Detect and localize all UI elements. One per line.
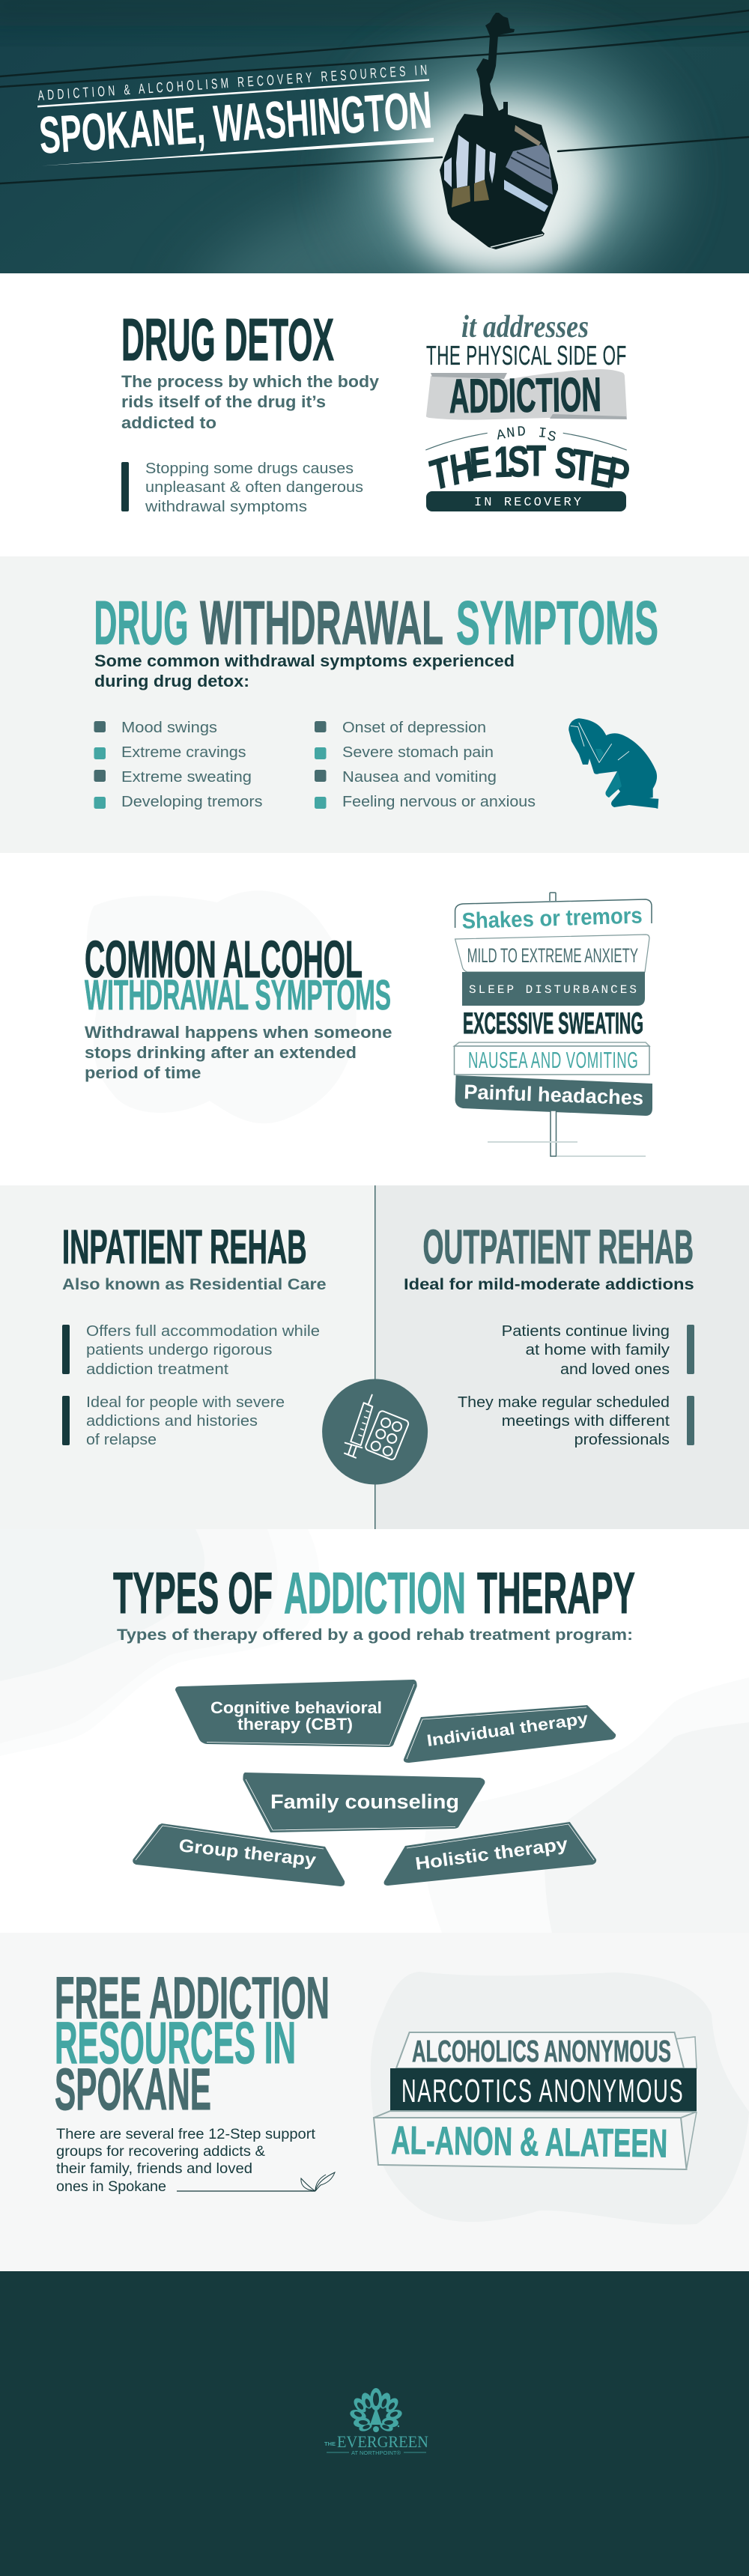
column: inpatient rehab: of relapse xyxy=(86,1432,157,1448)
list: symptoms column two: Onset of depression xyxy=(342,720,486,736)
lettering: first step badge: IN RECOVERY xyxy=(474,496,581,510)
column: outpatient rehab: Patients continue living xyxy=(502,1323,670,1340)
column: inpatient rehab: addictions and histories xyxy=(86,1413,258,1430)
text: definition: rids itself of the drug it’s xyxy=(121,392,326,411)
panel: drug withdrawal symptoms xyxy=(0,556,749,853)
card: individual therapy xyxy=(404,1705,616,1763)
callout: withdrawal warning: Stopping some drugs causes xyxy=(145,461,354,477)
card: cognitive behavioral therapy: Cognitive behavioral xyxy=(210,1698,382,1717)
card: holistic therapy xyxy=(384,1822,596,1886)
list: symptoms column two: Severe stomach pain xyxy=(342,744,494,761)
column: inpatient rehab: Also known as Residential Care xyxy=(62,1275,327,1293)
text: withdrawal description xyxy=(85,1023,392,1082)
column: inpatient rehab: patients undergo rigorous xyxy=(86,1342,273,1358)
column: inpatient rehab xyxy=(62,1220,327,1448)
card: holistic therapy: Holistic therapy xyxy=(414,1834,569,1874)
icon: kneeling person xyxy=(568,718,658,809)
panel: drug detox xyxy=(0,273,749,556)
hero title: SPOKANE, WASHINGTON xyxy=(37,80,434,165)
signpost: symptoms: Painful headaches xyxy=(464,1081,644,1109)
column: inpatient rehab: Offers full accommodation while xyxy=(86,1323,320,1340)
list: symptoms column one: Extreme cravings xyxy=(121,744,246,761)
column: inpatient rehab: Ideal for people with severe xyxy=(86,1394,285,1411)
callout: withdrawal warning: withdrawal symptoms xyxy=(145,499,307,515)
list: symptoms column one xyxy=(94,720,262,810)
heading: drug withdrawal symptoms: DRUG xyxy=(94,588,189,657)
hero title: ADDICTION & ALCOHOLISM RECOVERY RESOURCES IN xyxy=(37,62,428,104)
list: symptoms column two: Feeling nervous or anxious xyxy=(342,794,536,810)
heading: drug detox: DRUG DETOX xyxy=(121,306,334,373)
list: symptoms column one: Mood swings xyxy=(121,720,217,736)
callout: withdrawal warning: unpleasant & often dangerous xyxy=(145,479,363,496)
heading: withdrawal symptoms: WITHDRAWAL SYMPTOMS xyxy=(85,971,391,1019)
text: intro: during drug detox: xyxy=(94,672,249,690)
lettering: first step badge: it addresses xyxy=(461,310,589,344)
text: intro xyxy=(94,651,515,690)
signpost: symptoms: Shakes or tremors xyxy=(461,903,643,934)
logo: the evergreen at northpoint: EVERGREEN xyxy=(337,2432,428,2451)
lettering: first step badge: AND IS xyxy=(495,423,557,446)
heading: common alcohol: COMMON ALCOHOL xyxy=(85,930,363,988)
signpost: symptoms: SLEEP DISTURBANCES xyxy=(469,983,637,997)
cables xyxy=(0,10,749,183)
panel: footer xyxy=(0,2271,749,2576)
text: withdrawal description: stops drinking after an extended xyxy=(85,1043,357,1062)
text: support groups: There are several free 12-Step support xyxy=(56,2127,316,2142)
card: group therapy: Group therapy xyxy=(178,1835,318,1871)
lettering: first step badge: THE PHYSICAL SIDE OF xyxy=(426,341,626,371)
card: cognitive behavioral therapy xyxy=(175,1680,417,1747)
signpost: symptoms: NAUSEA AND VOMITING xyxy=(468,1048,638,1073)
list: symptoms column one: Extreme sweating xyxy=(121,769,252,786)
blob background xyxy=(371,1972,749,2225)
icon: syringe and pills xyxy=(322,1379,428,1484)
books: support groups xyxy=(374,2032,697,2169)
column: inpatient rehab: INPATIENT REHAB xyxy=(62,1220,307,1274)
panel: free addiction resources xyxy=(0,1933,749,2271)
heading: free addiction resources in spokane: RESOURCES IN xyxy=(55,2009,296,2076)
lettering: first step badge: ADDICTION xyxy=(449,368,601,423)
heading: types of addiction therapy: THERAPY xyxy=(477,1560,635,1626)
logo: the evergreen at northpoint xyxy=(324,2388,428,2456)
text: therapy intro: Types of therapy offered by a good rehab treatment program: xyxy=(117,1626,633,1644)
lettering: first step badge: THE 1ST STEP xyxy=(427,437,633,501)
column: outpatient rehab xyxy=(404,1220,694,1448)
text: definition: The process by which the body xyxy=(121,372,380,391)
column: outpatient rehab: meetings with different xyxy=(502,1413,670,1430)
panel: alcohol withdrawal symptoms xyxy=(0,853,749,1185)
icon: leaf underline xyxy=(177,2172,335,2191)
heading: free addiction resources in spokane: SPOKANE xyxy=(55,2056,211,2122)
text: support groups: groups for recovering addicts & xyxy=(56,2144,265,2160)
text: definition: addicted to xyxy=(121,413,216,432)
logo: the evergreen at northpoint: AT NORTHPOINT® xyxy=(351,2450,401,2456)
column: outpatient rehab: They make regular scheduled xyxy=(458,1394,670,1411)
column: inpatient rehab: addiction treatment xyxy=(86,1361,228,1378)
column: outpatient rehab: Ideal for mild-moderate addictions xyxy=(404,1275,694,1293)
text: withdrawal description: Withdrawal happens when someone xyxy=(85,1023,392,1042)
blob background xyxy=(87,890,357,1123)
callout: withdrawal warning xyxy=(121,461,363,515)
list: symptoms column one: Developing tremors xyxy=(121,794,262,810)
books: support groups: NARCOTICS ANONYMOUS xyxy=(401,2072,683,2109)
heading: free addiction resources in spokane: FREE ADDICTION xyxy=(55,1964,330,2031)
logo: the evergreen at northpoint: THE xyxy=(324,2440,336,2447)
hero title xyxy=(37,62,434,166)
card: family counseling: Family counseling xyxy=(270,1790,459,1813)
heading: drug withdrawal symptoms: WITHDRAWAL xyxy=(200,588,443,657)
text: support groups: their family, friends and loved xyxy=(56,2161,252,2177)
text: intro: Some common withdrawal symptoms experienced xyxy=(94,651,515,670)
text: support groups: ones in Spokane xyxy=(56,2179,166,2195)
panel: hero xyxy=(0,0,749,273)
heading: types of addiction therapy xyxy=(113,1560,635,1626)
panel: types of addiction therapy xyxy=(0,1529,749,1933)
list: symptoms column two xyxy=(315,720,536,810)
text: support groups xyxy=(56,2127,316,2195)
heading: types of addiction therapy: ADDICTION xyxy=(284,1560,466,1626)
column: outpatient rehab: and loved ones xyxy=(560,1361,670,1378)
heading: free addiction resources in spokane xyxy=(55,1964,330,2122)
panel: rehab comparison xyxy=(0,1185,749,1529)
card: family counseling xyxy=(243,1772,485,1832)
card: group therapy xyxy=(133,1823,345,1886)
column: outpatient rehab: at home with family xyxy=(526,1342,670,1358)
list: symptoms column two: Nausea and vomiting xyxy=(342,769,497,786)
text: definition xyxy=(121,372,380,432)
column: outpatient rehab: professionals xyxy=(574,1432,670,1448)
heading: types of addiction therapy: TYPES OF xyxy=(113,1560,273,1626)
signpost: symptoms: MILD TO EXTREME ANXIETY xyxy=(467,944,638,967)
text: withdrawal description: period of time xyxy=(85,1063,201,1082)
lettering: first step badge xyxy=(425,310,633,511)
card: individual therapy: Individual therapy xyxy=(425,1709,589,1750)
signpost: symptoms xyxy=(454,893,652,1157)
gondola cabin xyxy=(440,13,558,249)
card: cognitive behavioral therapy: therapy (CBT) xyxy=(237,1715,353,1734)
